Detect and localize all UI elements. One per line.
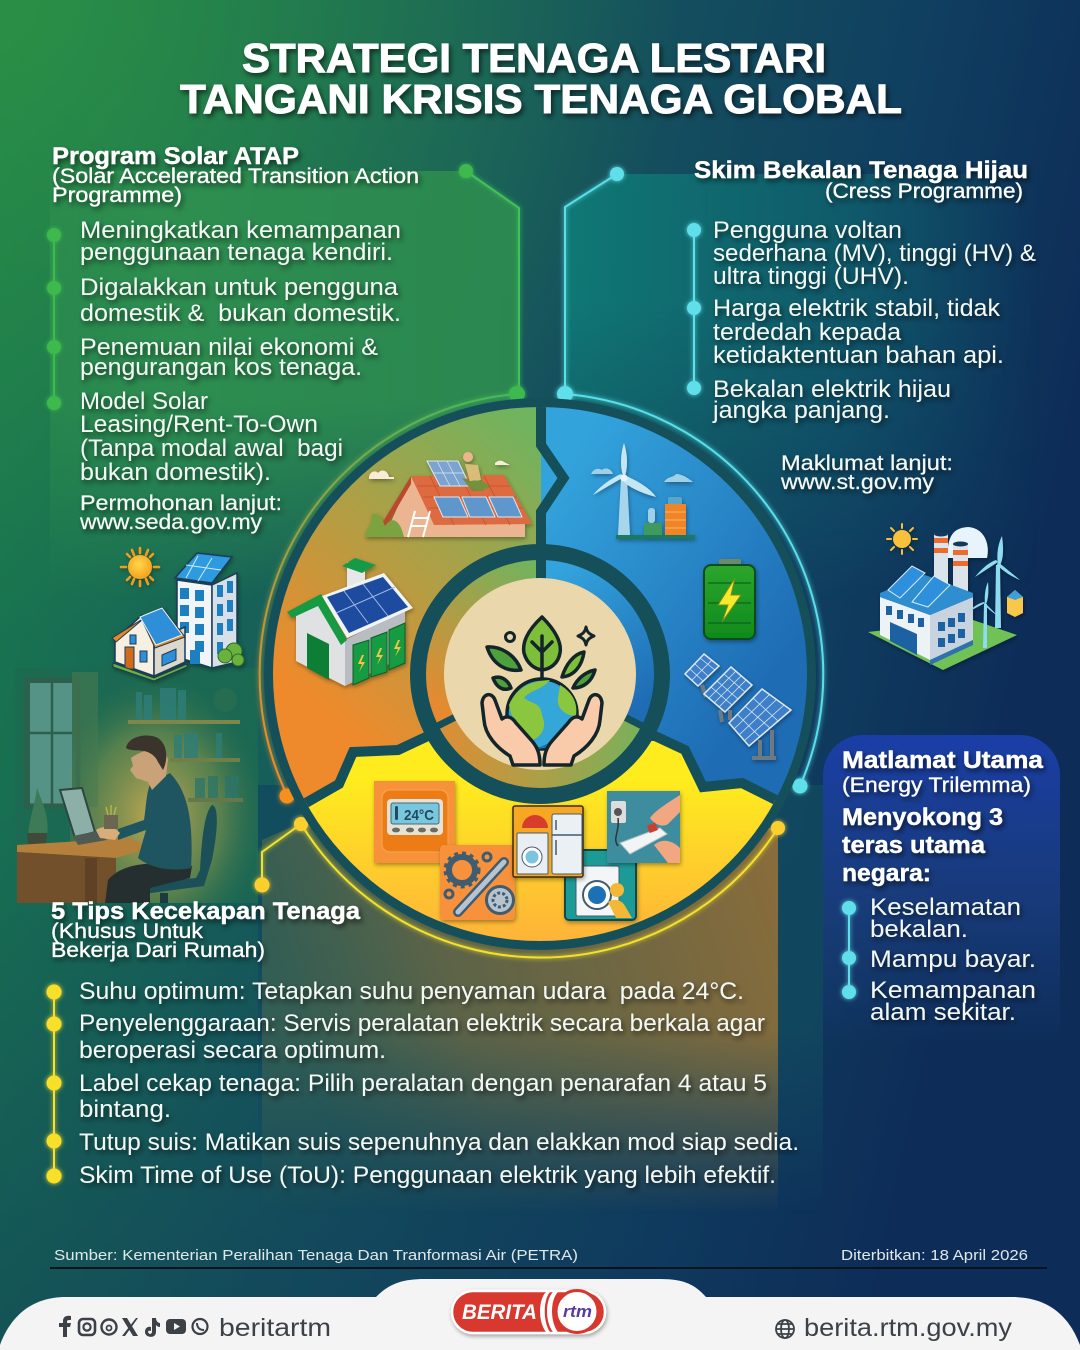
hands and cup <box>96 827 120 840</box>
heading: 5 tips kecekapan tenaga: (Khusus Untuk <box>51 919 203 943</box>
icon: green battery <box>704 559 755 639</box>
text block: solar atap points: bukan domestik). <box>80 459 271 486</box>
text block: maklumat lanjut: Maklumat lanjut: <box>781 451 953 475</box>
text block: tips list: Label cekap tenaga: Pilih peralatan dengan penarafan 4 atau 5 <box>79 1070 767 1097</box>
panel: tips backdrop <box>262 823 778 1215</box>
icon: thermostat 24C: 24°C <box>404 807 434 824</box>
icon: switching off power strip <box>607 791 680 863</box>
social icons <box>59 1316 208 1337</box>
icon: maintenance tools <box>440 845 515 920</box>
centre disc <box>444 578 636 770</box>
text block: solar atap points: Penemuan nilai ekonomi & <box>80 334 378 361</box>
logo: berita rtm <box>452 1290 605 1333</box>
bullet rail: trilemma <box>842 901 856 999</box>
heading: 5 tips kecekapan tenaga: Bekerja Dari Rumah) <box>51 938 265 962</box>
torso <box>118 773 192 870</box>
laptop <box>60 788 95 838</box>
text block: solar atap points <box>79 217 401 534</box>
heading: skim bekalan tenaga hijau <box>694 157 1028 203</box>
text block: tips list: beroperasi secara optimum. <box>79 1037 386 1064</box>
footer bar <box>0 1279 1080 1350</box>
text block: solar atap points: pengurangan kos tenaga. <box>80 354 362 381</box>
logo: berita rtm: rtm <box>563 1302 592 1321</box>
text block: solar atap points: www.seda.gov.my <box>79 510 262 534</box>
text block: cress points: Bekalan elektrik hijau <box>713 376 951 403</box>
panel: lower dark backdrop <box>258 785 823 1134</box>
trousers <box>105 863 192 903</box>
text block: solar atap points: Model Solar <box>80 388 208 415</box>
heading: 5 tips kecekapan tenaga: 5 Tips Kecekapan Tenaga <box>51 898 361 925</box>
wheel sectors <box>270 400 812 960</box>
title: STRATEGI TENAGA LESTARI <box>242 35 826 81</box>
heading: matlamat utama: negara: <box>842 860 931 887</box>
heading: program solar atap <box>52 143 419 207</box>
text block: trilemma points: bekalan. <box>870 916 968 943</box>
plant <box>27 788 48 858</box>
text block: trilemma points: alam sekitar. <box>870 999 1016 1026</box>
icon: hands holding globe with leaves <box>482 617 602 765</box>
window <box>27 672 98 807</box>
logo: berita rtm: BERITA <box>462 1301 537 1324</box>
icon: washing machine with control <box>565 850 636 920</box>
text block: trilemma points <box>870 894 1036 1026</box>
panel: solar atap backdrop <box>50 171 519 600</box>
heading: 5 tips kecekapan tenaga <box>51 898 361 962</box>
text block: solar atap points: (Tanpa modal awal bagi <box>80 435 343 462</box>
connector: solar atap to wheel <box>260 171 519 795</box>
desk <box>17 838 149 858</box>
heading: skim bekalan tenaga hijau: Skim Bekalan Tenaga Hijau <box>694 157 1028 184</box>
text block: solar atap points: penggunaan tenaga kendiri. <box>80 239 393 266</box>
text block: cress points: sederhana (MV), tinggi (HV) & <box>713 240 1036 267</box>
icon: globe <box>776 1320 794 1338</box>
text block: maklumat lanjut <box>780 451 953 494</box>
heading: matlamat utama: Matlamat Utama <box>842 747 1044 774</box>
text block: cress points: Pengguna voltan <box>713 217 902 244</box>
panel: matlamat utama <box>823 735 1060 1045</box>
heading: program solar atap: Program Solar ATAP <box>52 143 299 170</box>
text block: solar atap points: Digalakkan untuk pengguna <box>80 274 399 301</box>
text block: trilemma points: Mampu bayar. <box>870 946 1036 973</box>
text block: solar atap points: Permohonan lanjut: <box>80 491 282 515</box>
text block: cress points: terdedah kepada <box>713 319 902 346</box>
text block: solar atap points: Meningkatkan kemampanan <box>80 217 401 244</box>
heading: matlamat utama: Menyokong 3 <box>842 804 1003 831</box>
heading: matlamat utama: teras utama <box>842 832 986 859</box>
icon: house and tower with solar panels <box>112 548 244 681</box>
panel: cress backdrop <box>566 174 984 520</box>
text block: solar atap points: domestik & bukan domestik. <box>80 300 401 327</box>
heading: skim bekalan tenaga hijau: (Cress Programme) <box>825 179 1023 203</box>
icon: house with solar panel and batteries <box>287 558 413 686</box>
text block: trilemma points: Keselamatan <box>870 894 1021 921</box>
source line <box>50 1247 1047 1269</box>
heading: program solar atap: Programme) <box>52 183 182 207</box>
bullet rail: tips <box>46 984 62 1184</box>
inner ring <box>418 552 662 800</box>
icon: wind turbine and storage <box>591 443 695 539</box>
icon: appliances <box>513 806 583 877</box>
shelves <box>128 688 243 802</box>
icon: green factory with wind and solar <box>868 524 1023 670</box>
photo: man working from home <box>15 668 258 903</box>
handle: beritartm <box>219 1314 331 1342</box>
heading: matlamat utama: (Energy Trilemma) <box>842 773 1031 797</box>
source line: Sumber: Kementerian Peralihan Tenaga Dan Tranformasi Air (PETRA) <box>54 1247 578 1264</box>
title <box>180 35 902 122</box>
connector: tips to wheel <box>262 824 778 958</box>
head <box>130 750 168 790</box>
text block: trilemma points: Kemampanan <box>870 977 1036 1004</box>
text block: cress points <box>712 217 1036 424</box>
heading: program solar atap: (Solar Accelerated Transition Action <box>52 164 419 188</box>
text block: cress points: ketidaktentuan bahan api. <box>713 342 1004 369</box>
text block: tips list: Tutup suis: Matikan suis sepenuhnya dan elakkan mod siap sedia. <box>79 1129 799 1156</box>
text block: cress points: jangka panjang. <box>712 397 890 424</box>
text block: cress points: ultra tinggi (UHV). <box>713 263 909 290</box>
text block: cress points: Harga elektrik stabil, tidak <box>713 295 1001 322</box>
text block: maklumat lanjut: www.st.gov.my <box>780 470 934 494</box>
icon: solar panel array <box>685 654 791 760</box>
text block: solar atap points: Leasing/Rent-To-Own <box>80 411 318 438</box>
title: TANGANI KRISIS TENAGA GLOBAL <box>180 76 902 122</box>
source line: Diterbitkan: 18 April 2026 <box>841 1247 1028 1264</box>
text block: tips list <box>79 978 799 1189</box>
text block: tips list: Penyelenggaraan: Servis peralatan elektrik secara berkala agar <box>79 1010 765 1037</box>
heading: matlamat utama <box>842 747 1044 887</box>
icon: thermostat 24C <box>374 781 455 863</box>
connector: cress to wheel <box>565 174 823 786</box>
icon: worker installing rooftop solar <box>365 452 532 537</box>
connector dots <box>254 164 808 892</box>
bullet rail: cress <box>687 223 701 395</box>
energy wheel <box>264 398 816 960</box>
chair <box>150 805 217 894</box>
text block: tips list: Skim Time of Use (ToU): Penggunaan elektrik yang lebih efektif. <box>79 1162 776 1189</box>
bullet rail: solar atap <box>47 228 61 410</box>
website: berita.rtm.gov.my <box>804 1314 1013 1342</box>
text block: tips list: Suhu optimum: Tetapkan suhu penyaman udara pada 24°C. <box>79 978 744 1005</box>
text block: tips list: bintang. <box>79 1096 171 1123</box>
